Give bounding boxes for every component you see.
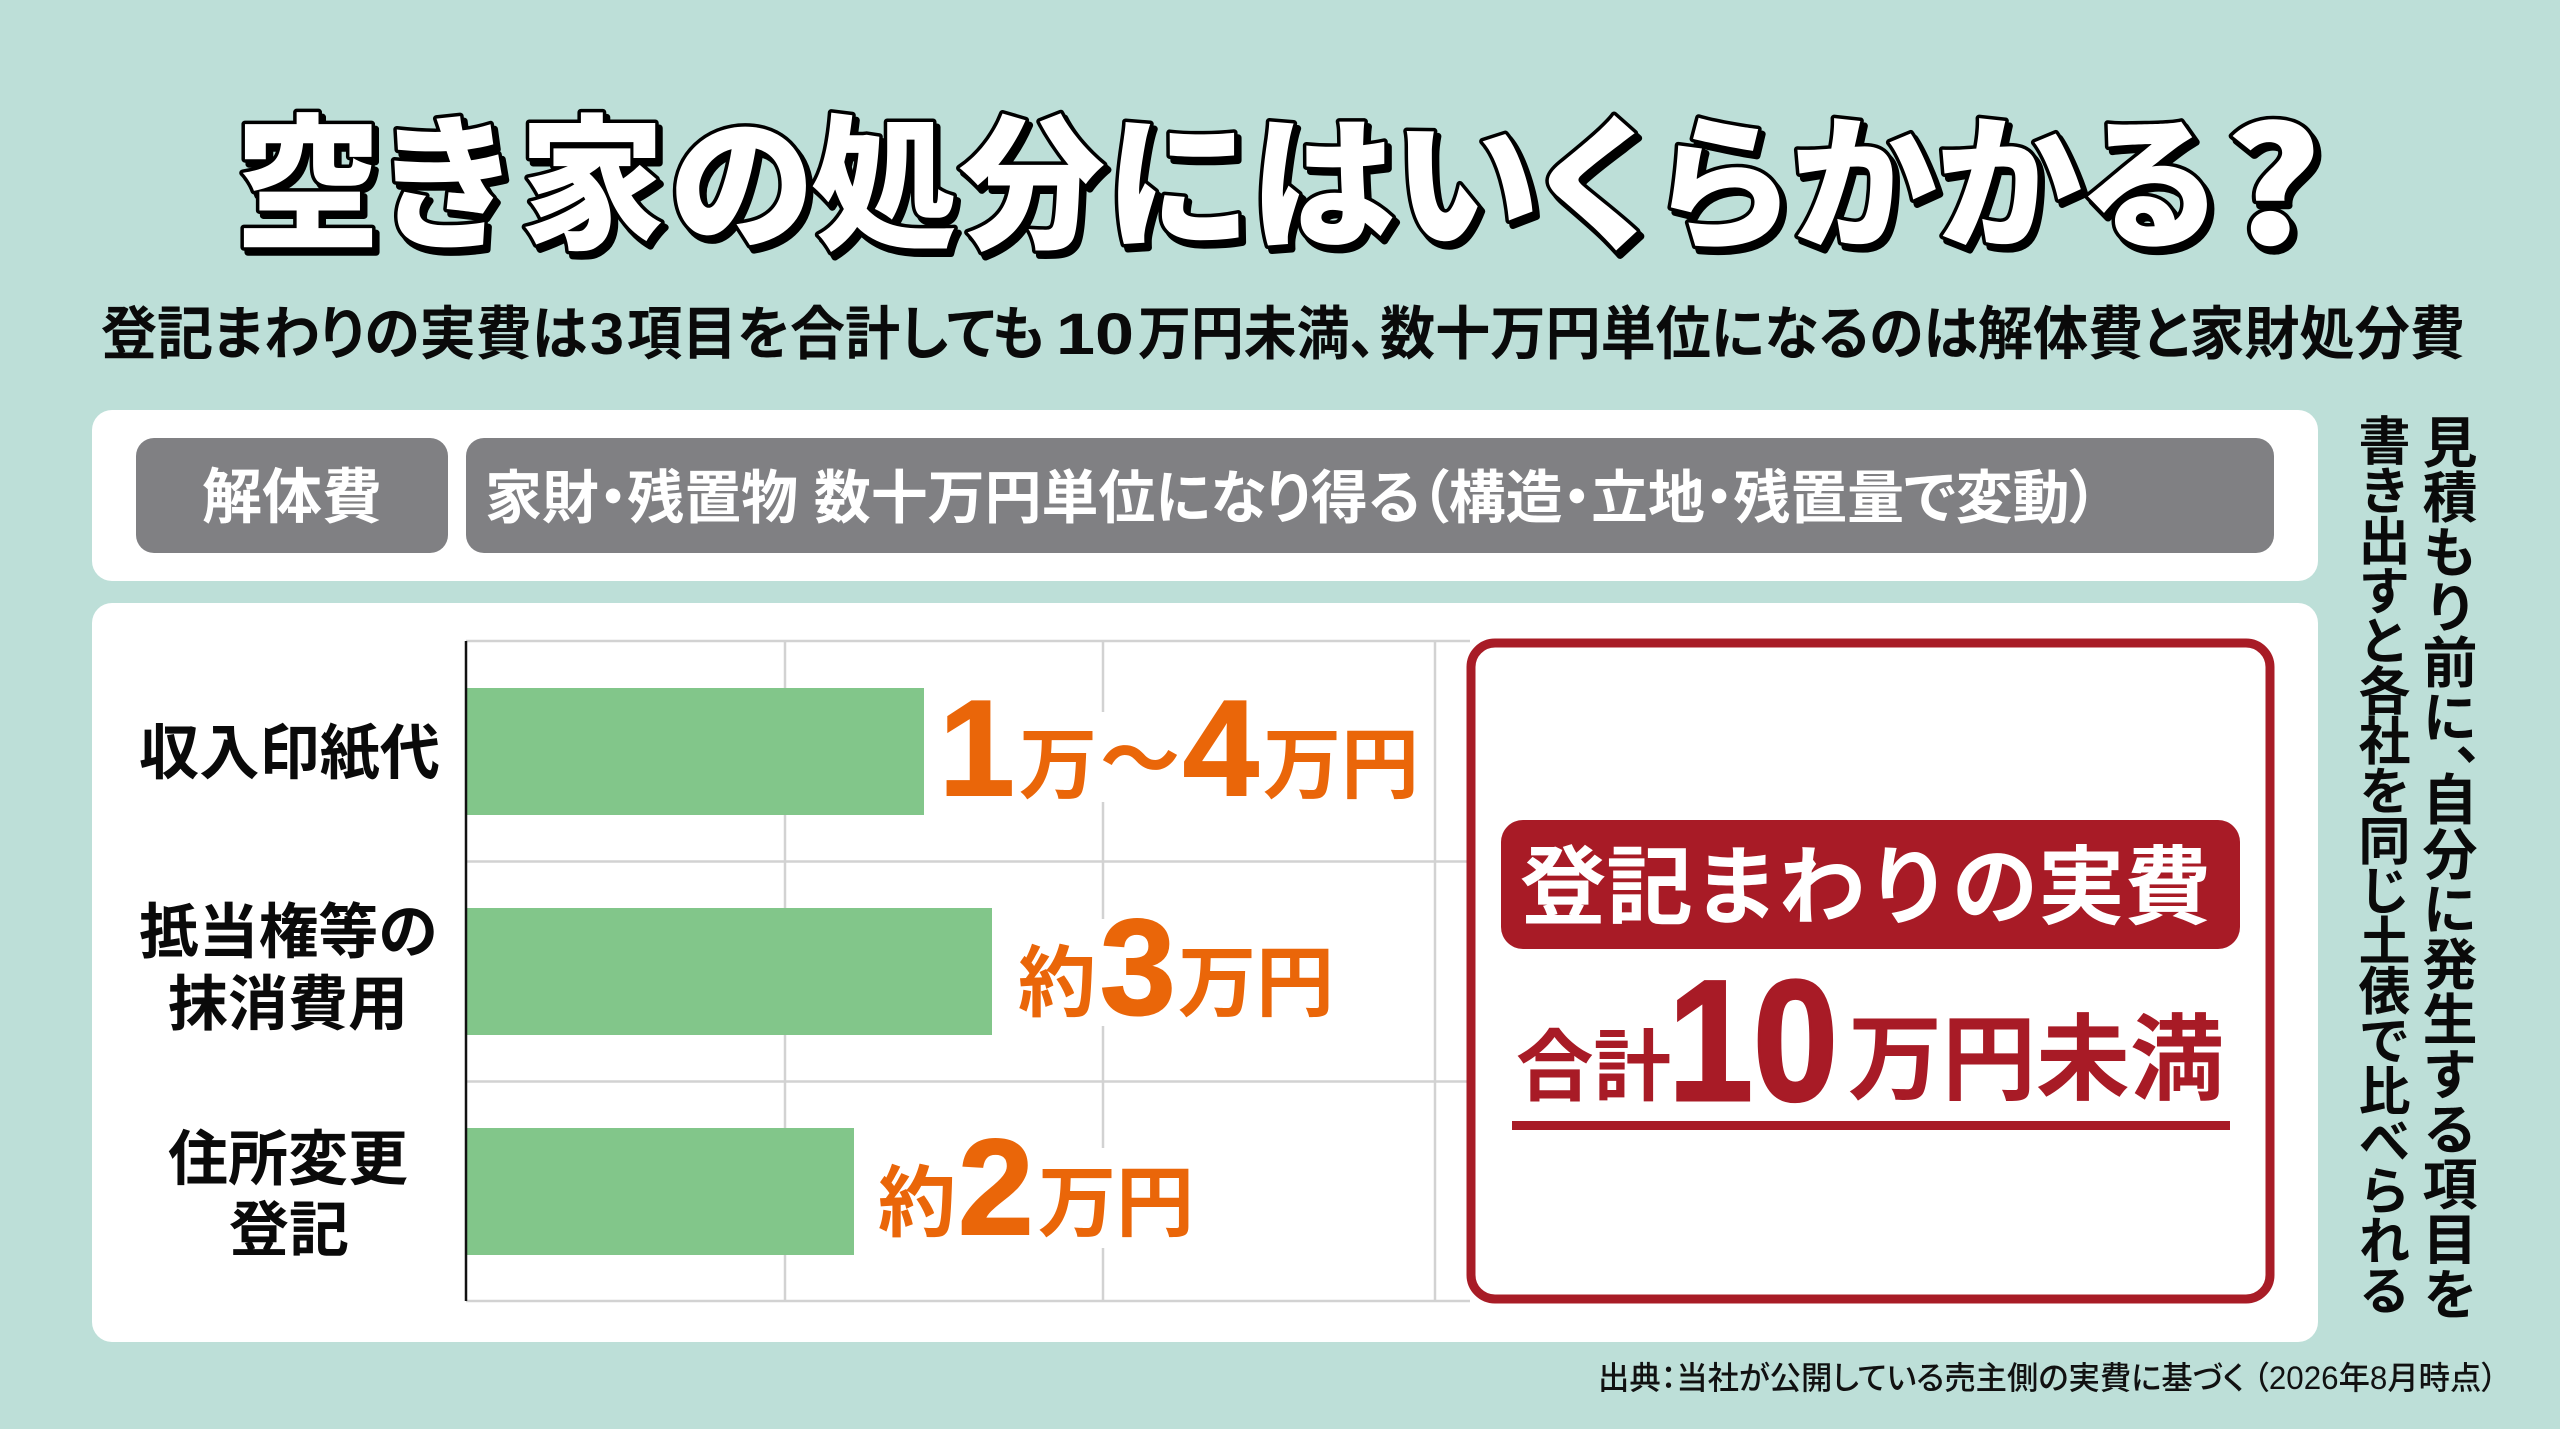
- callout total: 10: [1668, 945, 1838, 1137]
- label pill: demolition cost: [136, 438, 448, 553]
- value: address change: 万円: [1038, 1159, 1194, 1247]
- bar: mortgage cancellation: [467, 908, 992, 1035]
- row label: address change: [168, 1126, 408, 1264]
- value: address change: 約: [878, 1159, 956, 1247]
- panel: other costs: [92, 410, 2318, 581]
- row label: stamp duty: 収入印紙代: [139, 720, 440, 787]
- row label: address change: 住所変更: [168, 1126, 408, 1193]
- side note: vertical text: 自分に発生する項目を: [2414, 771, 2478, 1321]
- subtitle: 項目を合計しても: [627, 302, 1045, 367]
- callout total: [1512, 945, 2230, 1137]
- row label: mortgage cancellation: [139, 899, 438, 1038]
- subtitle: [101, 302, 2465, 367]
- value: stamp duty: 1: [939, 672, 1015, 824]
- row label: address change: 登記: [229, 1197, 349, 1264]
- value: stamp duty: [939, 672, 1419, 824]
- subtitle: 登記まわりの実費は: [101, 302, 587, 367]
- value: mortgage cancellation: 万円: [1178, 939, 1334, 1027]
- value: address change: [878, 1111, 1194, 1263]
- row label: mortgage cancellation: 抵当権等の: [139, 899, 438, 966]
- source note: 出典：当社が公開している売主側の実費に基づく （2026年8月時点）: [1598, 1360, 2497, 1396]
- label pill: demolition cost: 解体費: [202, 464, 382, 531]
- panel: registration costs: [92, 603, 2318, 1342]
- value: stamp duty: 万円: [1263, 721, 1419, 809]
- description pill: household goods: 家財・残置物 数十万円単位になり得る（構造・立地・残置量で変動）: [485, 466, 2098, 531]
- title: ?: [2224, 59, 2322, 291]
- callout heading: 登記まわりの実費: [1520, 840, 2211, 936]
- subtitle: 数十万円単位になるのは解体費と家財処分費: [1380, 302, 2465, 367]
- side note: vertical text: 見積もり前に、: [2414, 414, 2478, 799]
- callout heading: [1501, 820, 2240, 949]
- subtitle: 10: [1056, 302, 1134, 367]
- row label: mortgage cancellation: 抹消費用: [168, 971, 408, 1038]
- bar: address change: [467, 1128, 854, 1255]
- callout: total under 100k yen: [1471, 643, 2270, 1299]
- side note: vertical text: 書き出すと各社を同じ土俵で比べられる: [2350, 414, 2410, 1314]
- callout total: 万円未満: [1848, 1007, 2224, 1112]
- bar chart: [139, 641, 1470, 1301]
- description pill: household goods: [466, 438, 2274, 553]
- title: 空き家の処分にはいくらかかる: [235, 69, 2223, 280]
- value: stamp duty: 4: [1183, 672, 1259, 824]
- value: stamp duty: 万: [1019, 721, 1097, 809]
- bar: stamp duty: [467, 688, 924, 815]
- subtitle: 万円未満、: [1138, 302, 1376, 367]
- subtitle: 3: [590, 302, 624, 367]
- callout total: 合計: [1516, 1023, 1671, 1111]
- value: mortgage cancellation: [1018, 891, 1334, 1043]
- side note: vertical text: [2350, 414, 2478, 1321]
- value: stamp duty: 〜: [1100, 716, 1180, 805]
- value: mortgage cancellation: 3: [1100, 891, 1176, 1043]
- value: mortgage cancellation: 約: [1018, 939, 1096, 1027]
- value: address change: 2: [958, 1111, 1034, 1263]
